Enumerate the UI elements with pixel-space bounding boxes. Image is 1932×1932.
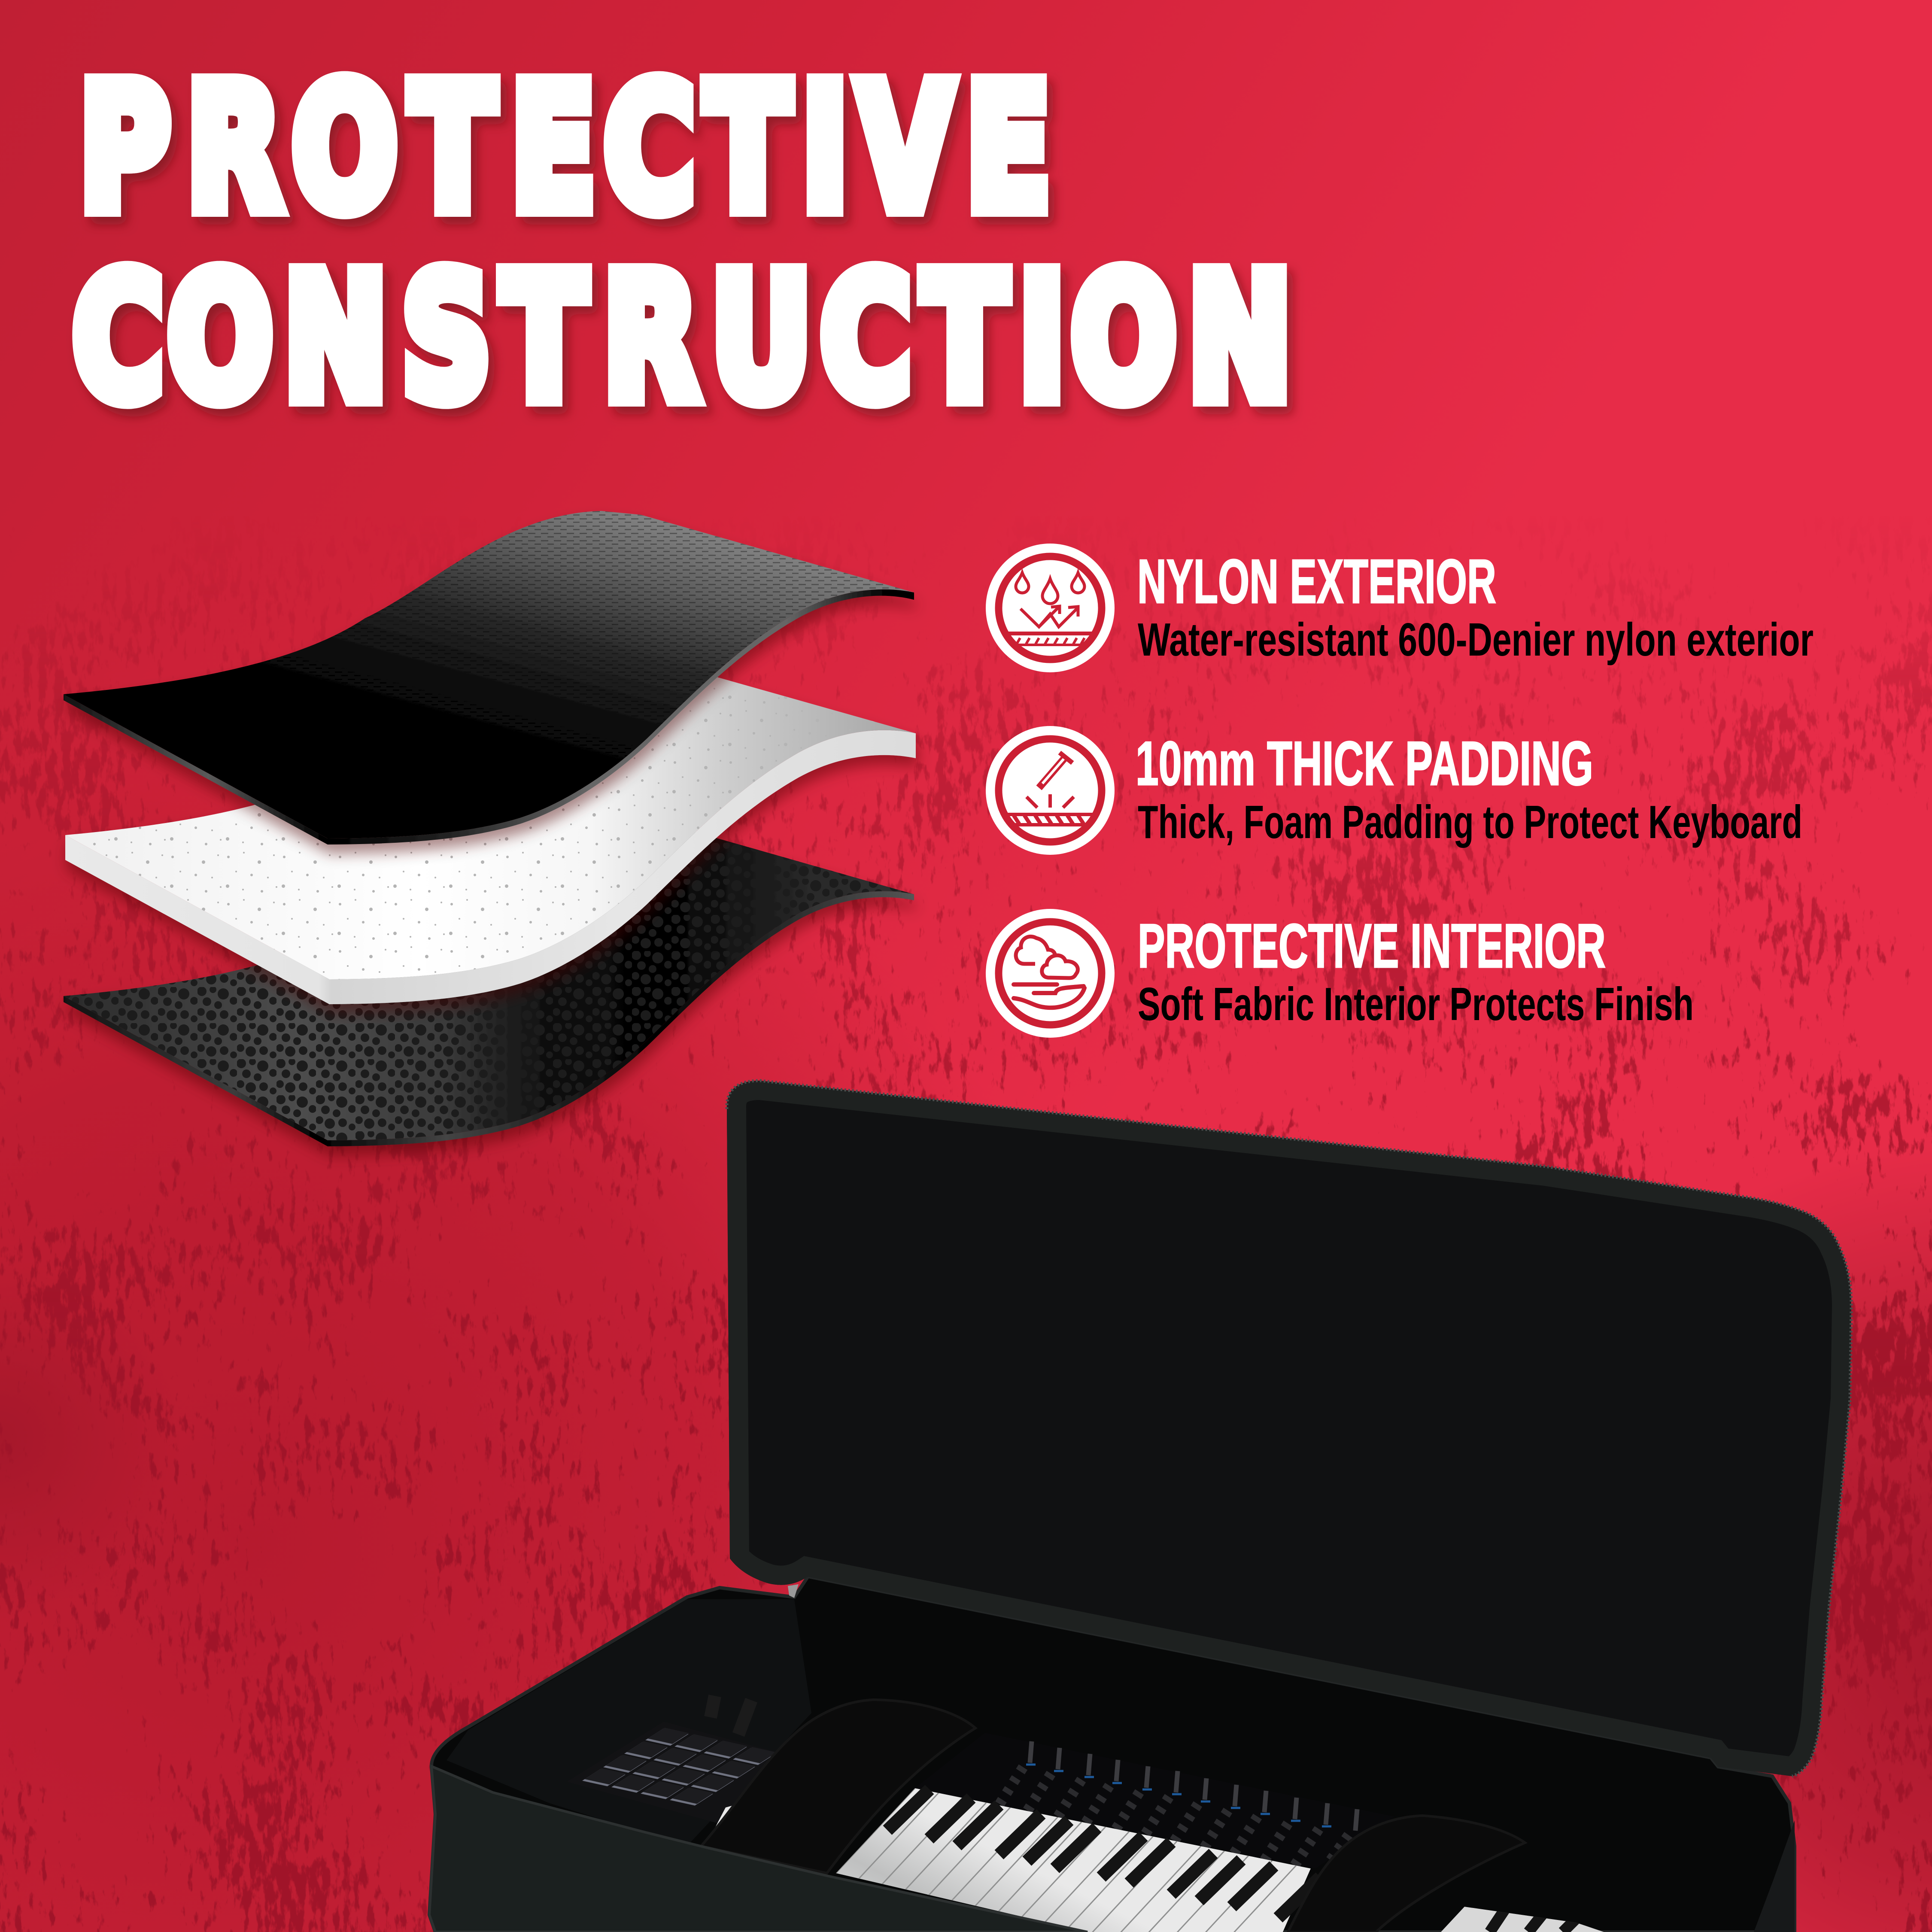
bag base interior bbox=[429, 1577, 1795, 1932]
lid lining bbox=[727, 1081, 1851, 1776]
pads bbox=[582, 1728, 778, 1806]
lid zipper bbox=[727, 1081, 1851, 1776]
layer: white foam padding bbox=[65, 652, 916, 1004]
left strap bbox=[701, 1700, 975, 1873]
icon: nail hitting padding bbox=[986, 726, 1115, 855]
front wall of bag bbox=[429, 1766, 1088, 1932]
second keyboard section bbox=[1441, 1906, 1604, 1932]
feature: nylon exterior bbox=[986, 544, 1814, 672]
heading: NYLON EXTERIOR bbox=[1137, 547, 1496, 616]
illustration: three material layers bbox=[64, 511, 916, 1146]
title: Protective Construction bbox=[73, 49, 1291, 437]
title line 1: PROTECTIVE bbox=[80, 49, 1051, 248]
layer: pebbled black interior bbox=[64, 813, 914, 1146]
right strap bbox=[1288, 1816, 1525, 1932]
feature: protective interior bbox=[986, 909, 1694, 1038]
heading: PROTECTIVE INTERIOR bbox=[1138, 911, 1606, 981]
keyboard bbox=[786, 1733, 1604, 1932]
blue fader lights bbox=[1026, 1765, 1331, 1826]
lid padded rim bbox=[727, 1081, 1851, 1776]
white keys bbox=[786, 1788, 1311, 1932]
left inner wall bbox=[447, 1599, 811, 1846]
layer: black nylon exterior bbox=[64, 511, 914, 844]
heading: 10mm THICK PADDING bbox=[1136, 729, 1593, 798]
pad controller bbox=[567, 1696, 784, 1830]
zipper pull bbox=[788, 1584, 799, 1598]
feature: 10mm thick padding bbox=[986, 726, 1802, 855]
white sliver of keyboard bbox=[715, 1805, 733, 1830]
open lid with padded lining bbox=[727, 1081, 1851, 1776]
icon: water drops repelled from surface bbox=[986, 544, 1115, 672]
fader sticks bbox=[1030, 1741, 1357, 1831]
title line 2: CONSTRUCTION bbox=[73, 238, 1291, 437]
control rows bbox=[993, 1767, 1349, 1871]
description: Soft Fabric Interior Protects Finish bbox=[1138, 978, 1694, 1030]
icon: soft clouds over hand bbox=[986, 909, 1115, 1038]
control panel bbox=[915, 1733, 1394, 1868]
right wall of bag bbox=[1754, 1820, 1795, 1932]
product: open keyboard gig bag bbox=[429, 1081, 1851, 1932]
black keys bbox=[887, 1789, 1320, 1918]
controller pegs bbox=[711, 1696, 751, 1735]
controller body bbox=[567, 1722, 784, 1829]
